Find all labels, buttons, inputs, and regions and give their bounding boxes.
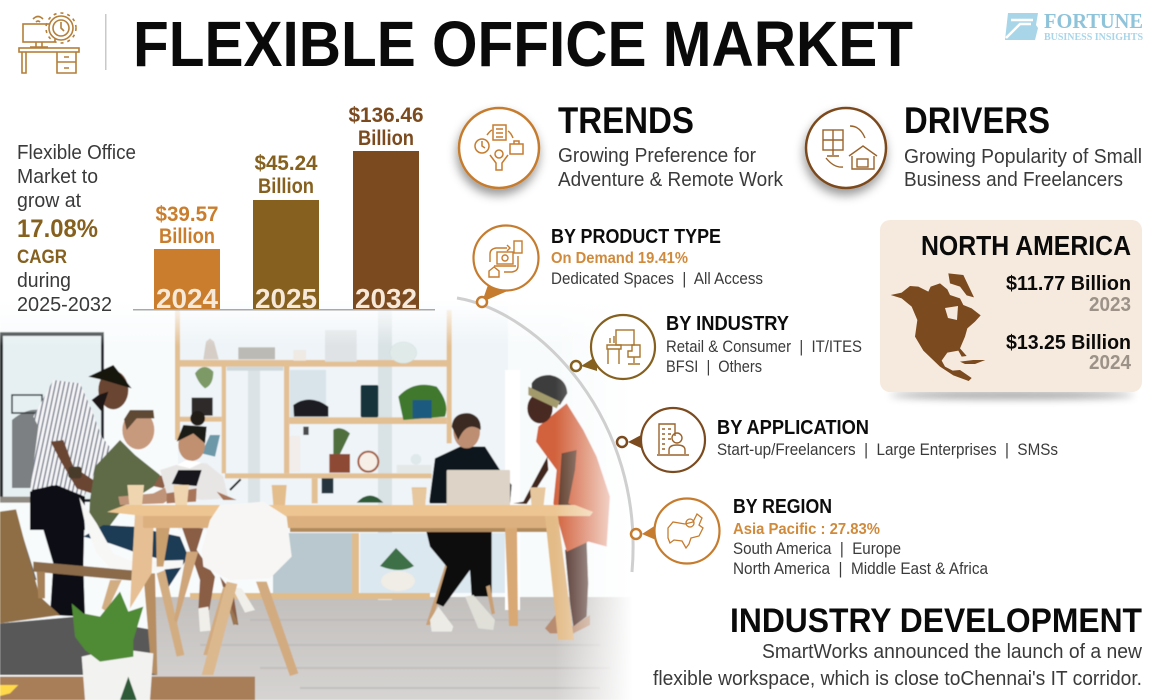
floor — [150, 597, 640, 700]
wall art — [0, 332, 104, 502]
bar 2024: 2024 — [156, 283, 218, 314]
segment: product type: On Demand 19.41% — [551, 250, 688, 267]
photo mask right — [633, 596, 640, 700]
sofa and cushion — [0, 497, 157, 675]
bar 2025: $45.24 — [254, 152, 318, 175]
bar 2032: $136.46 — [348, 104, 424, 127]
cups — [412, 487, 546, 507]
bar 2025: Billion — [258, 175, 314, 198]
trends text — [558, 100, 784, 191]
CAGR text block: 17.08% — [17, 215, 98, 243]
industry development — [653, 602, 1143, 690]
value 2024: $13.25 Billion — [1006, 332, 1131, 354]
CAGR text block: 2025-2032 — [17, 294, 112, 316]
segment: region: Asia Pacific : 27.83% — [733, 521, 880, 538]
segment arc — [457, 298, 633, 572]
trends text: Adventure & Remote Work — [558, 169, 784, 191]
bar chart — [133, 104, 435, 314]
value 2023: $11.77 Billion — [1006, 273, 1131, 295]
Hudson bay — [945, 306, 958, 320]
value 2024 — [1006, 332, 1132, 374]
segment: industry — [571, 313, 862, 379]
stool — [426, 564, 448, 626]
photo fade right — [558, 380, 632, 700]
drivers text: DRIVERS — [904, 100, 1050, 141]
logo: Fortune Business Insights: BUSINESS INSIGHTS — [1044, 32, 1143, 43]
industry development: flexible workspace, which is close toChennai's IT corridor. — [653, 668, 1142, 690]
header divider — [105, 14, 106, 70]
shelving and objects — [175, 310, 452, 507]
panel heading: NORTH AMERICA — [921, 230, 1131, 261]
people at left: three colleagues — [30, 365, 241, 530]
map of North America — [891, 273, 985, 381]
bar 2032: Billion — [358, 127, 414, 150]
foreground plant and table — [0, 592, 255, 700]
table left legs — [130, 513, 170, 608]
bar 2024 — [154, 203, 220, 314]
photo: office team around a wooden table — [0, 300, 642, 700]
woman in white top — [160, 411, 241, 503]
lower shelf rail — [190, 533, 430, 599]
CAGR text block: Flexible Office — [17, 142, 136, 164]
header icon: desk with computer and gear — [19, 13, 79, 73]
trends text: Growing Preference for — [558, 145, 756, 167]
segment: product type: Dedicated Spaces | All Access — [551, 269, 763, 288]
value 2023 — [1006, 273, 1131, 316]
value 2023: 2023 — [1089, 294, 1131, 316]
logo: Fortune Business Insights — [1005, 9, 1143, 43]
segment: application — [617, 408, 1058, 472]
segment: industry: BFSI | Others — [666, 357, 762, 376]
segment: product type: BY PRODUCT TYPE — [551, 226, 721, 248]
drivers text: Growing Popularity of Small — [904, 146, 1142, 168]
CAGR text block: during — [17, 270, 71, 292]
CAGR text block: grow at — [17, 190, 81, 212]
bar 2024: $39.57 — [156, 203, 218, 226]
segment: region: BY REGION — [733, 496, 832, 518]
industry development: SmartWorks announced the launch of a new — [762, 641, 1143, 663]
bar 2024: Billion — [159, 225, 215, 248]
segment: industry: BY INDUSTRY — [666, 313, 790, 335]
logo: Fortune Business Insights: FORTUNE — [1044, 9, 1143, 33]
panel shadow — [890, 391, 1134, 399]
bar 2032 — [348, 104, 424, 314]
value 2024: 2024 — [1089, 352, 1132, 374]
plant vase — [380, 548, 415, 591]
bar 2025 — [253, 152, 319, 314]
coffee cups — [127, 485, 189, 505]
wooden table — [107, 505, 593, 640]
lower left furniture — [0, 485, 255, 675]
segment: product type — [474, 226, 763, 307]
drivers text — [904, 100, 1142, 191]
CAGR text block — [17, 142, 136, 316]
front white chair — [202, 502, 298, 676]
photo fade top — [0, 300, 508, 344]
CAGR text block: CAGR — [17, 247, 67, 268]
segment: region: South America | Europe — [733, 539, 901, 558]
trends text: TRENDS — [558, 100, 694, 141]
trousers and jeans — [32, 485, 255, 632]
icon: trends — [459, 108, 539, 188]
left white chair — [79, 497, 238, 657]
title: FLEXIBLE OFFICE MARKET — [133, 8, 913, 80]
segment: application: Start-up/Freelancers | Large Enterprises | SMSs — [717, 440, 1058, 459]
segment: application: BY APPLICATION — [717, 417, 869, 439]
panel: North America — [880, 220, 1142, 392]
drivers text: Business and Freelancers — [904, 169, 1123, 191]
bar 2032: 2032 — [355, 283, 417, 314]
icon: drivers — [806, 108, 886, 188]
striped shirt man — [30, 365, 172, 530]
window behind shelving — [178, 300, 520, 610]
seated woman — [426, 413, 512, 632]
CAGR text block: Market to — [17, 166, 98, 188]
segment: region — [631, 496, 988, 578]
people at right: seated woman and standing woman — [412, 375, 610, 633]
standing woman in orange dress — [513, 375, 610, 633]
industry development: INDUSTRY DEVELOPMENT — [730, 602, 1142, 640]
green shirt man — [88, 410, 173, 530]
segment: region: North America | Middle East & Africa — [733, 559, 988, 578]
bar 2025: 2025 — [255, 283, 317, 314]
segment: industry: Retail & Consumer | IT/ITES — [666, 337, 862, 356]
